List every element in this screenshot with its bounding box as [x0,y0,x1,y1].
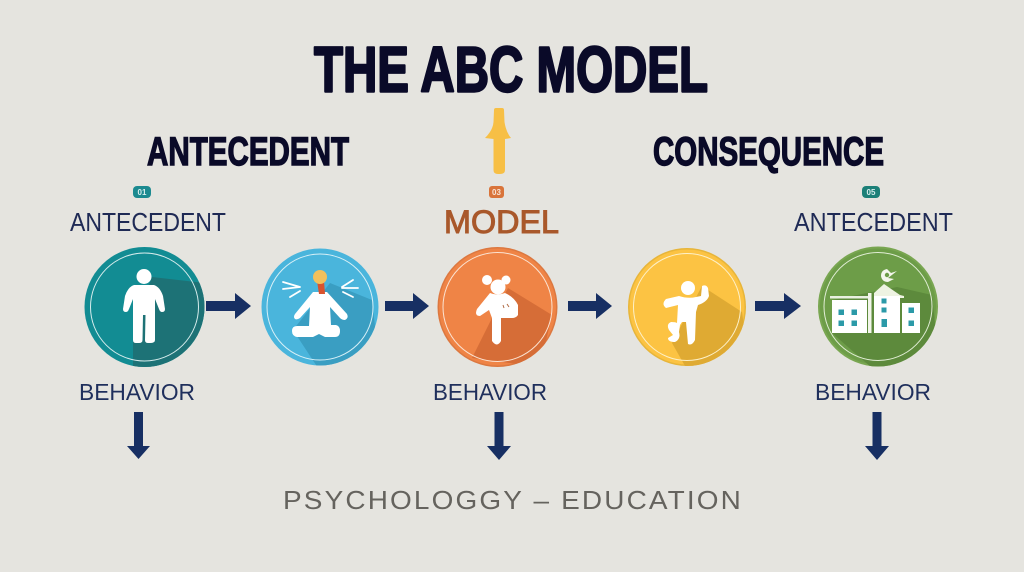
label: antecedent left: ANTECEDENT [70,207,226,237]
heading: consequence: CONSEQUENCE [653,130,884,174]
circle icon: child figure [438,247,558,367]
badge: step 5: 05 [867,188,876,197]
badge: step 3: 03 [492,188,501,197]
arrow: yellow up arrow [485,108,511,174]
arrow: step 2 to 3 [385,293,429,319]
circle icon: school building [818,246,940,370]
label: behavior left: BEHAVIOR [79,379,195,405]
label: behavior middle: BEHAVIOR [433,379,547,405]
badge: step 1: 01 [138,188,147,197]
badge: step 3 [489,186,504,198]
label: behavior right: BEHAVIOR [815,379,931,405]
arrow: step 4 to 5 [755,293,801,319]
arrow: down middle [487,412,511,460]
arrow: step 3 to 4 [568,293,612,319]
label: model: MODEL [444,204,559,240]
footer text: PSYCHOLOGGY – EDUCATION [283,485,743,515]
title: THE ABC MODEL [314,34,708,106]
arrow: down right [865,412,889,460]
arrow: step 1 to 2 [206,293,251,319]
label: antecedent right: ANTECEDENT [794,207,953,237]
badge: step 5 [862,186,880,198]
badge: step 1 [133,186,151,198]
circle icon: standing person [84,247,205,367]
infographic canvas [70,45,952,510]
arrow: down left [127,412,150,459]
circle icon: meditating person [262,248,380,370]
circle icon: stretching person [628,248,750,370]
heading: antecedent: ANTECEDENT [147,130,349,174]
